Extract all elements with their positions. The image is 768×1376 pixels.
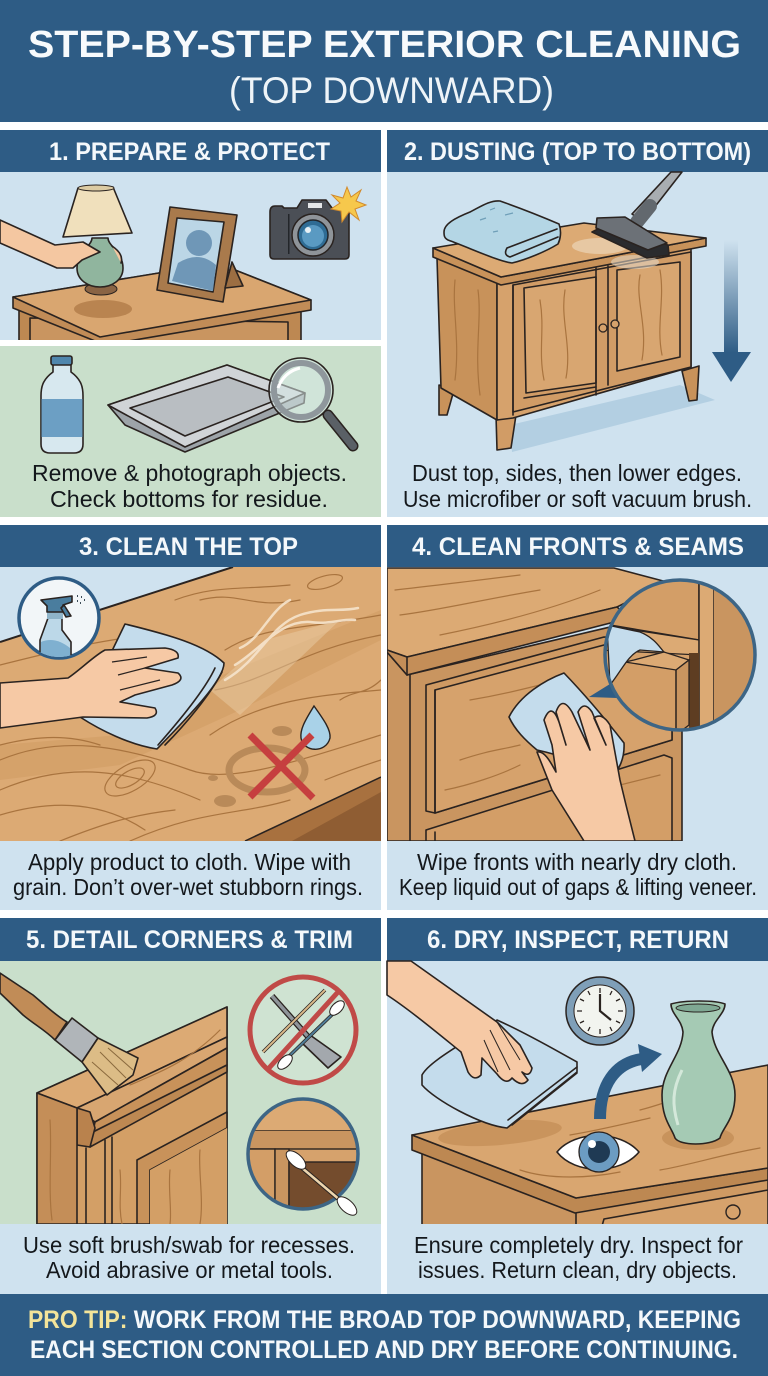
- panel: step 2 dusting: [387, 130, 768, 517]
- caption: step 5: Use soft brush/swab for recesses.: [23, 1232, 355, 1258]
- caption: step 1: Check bottoms for residue.: [50, 486, 328, 512]
- illustration: bottle, tray, magnifier: [0, 346, 381, 517]
- heading: step 1: [0, 130, 381, 172]
- pro tip text: [28, 1306, 741, 1364]
- illustration: dresser drawer: [387, 567, 768, 841]
- caption: step 3: grain. Don’t over-wet stubborn rings.: [13, 874, 363, 900]
- caption: step 3: Apply product to cloth. Wipe with: [28, 849, 351, 875]
- icon: cloth under hand: [80, 624, 224, 749]
- title: STEP-BY-STEP EXTERIOR CLEANING: [28, 24, 741, 66]
- icon: swab in corner detail: [245, 1099, 361, 1222]
- heading: step 3: [0, 525, 381, 567]
- icon: eye: [557, 1132, 639, 1172]
- arrow: return to table: [600, 1044, 662, 1119]
- caption: step 1: [32, 460, 347, 512]
- caption: step 4: [387, 841, 768, 910]
- panel: step 1 prepare and protect: [0, 130, 381, 517]
- heading: step 2: 2. DUSTING (TOP TO BOTTOM): [404, 138, 751, 166]
- caption: step 5: Avoid abrasive or metal tools.: [46, 1257, 333, 1283]
- icon: water ring with red cross: [208, 706, 330, 807]
- heading: step 4: 4. CLEAN FRONTS & SEAMS: [412, 533, 744, 561]
- icon: paint brush: [0, 973, 138, 1095]
- icon: spray bottle in circle: [19, 578, 99, 660]
- caption: step 2: Use microfiber or soft vacuum brush.: [403, 486, 752, 512]
- icon: tray: [108, 365, 305, 452]
- icon: vase: [662, 1001, 735, 1144]
- icon: clock: [566, 977, 634, 1045]
- icon: folded microfiber towel: [444, 201, 561, 263]
- caption: step 1: Remove & photograph objects.: [32, 460, 347, 486]
- illustration: cabinet: [433, 223, 715, 452]
- caption: step 4: Wipe fronts with nearly dry cloth.: [417, 849, 737, 875]
- illustration: trim with brush: [0, 961, 381, 1224]
- caption: step 6: Ensure completely dry. Inspect for: [414, 1232, 743, 1258]
- panel: step 6 dry, inspect, return: [387, 918, 768, 1294]
- illustration: table with lamp, frame and camera: [0, 172, 381, 345]
- panel: step 3 clean the top: [0, 525, 381, 910]
- icon: hand: [0, 648, 181, 728]
- caption: step 6: issues. Return clean, dry objects.: [418, 1257, 737, 1283]
- illustration: table, hand, vase: [387, 961, 768, 1226]
- heading: step 5: [0, 918, 381, 961]
- icon: camera with flash: [270, 187, 366, 259]
- heading: step 1: 1. PREPARE & PROTECT: [49, 138, 330, 166]
- callout: zoomed seam: [589, 578, 757, 732]
- icon: prohibited sharp tools: [250, 977, 356, 1083]
- icon: hand: [537, 704, 635, 841]
- arrow: top to bottom: [712, 240, 751, 382]
- caption: step 2: Dust top, sides, then lower edges.: [412, 460, 742, 486]
- caption: step 6: [387, 1224, 768, 1294]
- caption: step 2: [403, 460, 752, 512]
- panel: step 4 clean fronts and seams: [387, 525, 768, 910]
- heading: step 3: 3. CLEAN THE TOP: [79, 533, 298, 561]
- icon: cloth and hand: [387, 961, 577, 1128]
- icon: cloth under hand: [509, 673, 624, 780]
- caption: step 5: [0, 1224, 381, 1294]
- heading: step 4: [387, 525, 768, 567]
- title: (TOP DOWNWARD): [229, 70, 554, 111]
- title banner: [0, 0, 768, 122]
- icon: vacuum brush: [592, 172, 682, 258]
- title: [28, 24, 741, 111]
- heading: step 6: 6. DRY, INSPECT, RETURN: [427, 926, 729, 954]
- illustration: wiping tabletop: [0, 567, 381, 841]
- footer: pro tip: [0, 1294, 768, 1376]
- heading: step 6: [387, 918, 768, 961]
- icon: magnifying glass: [269, 358, 353, 446]
- heading: step 5: 5. DETAIL CORNERS & TRIM: [26, 926, 353, 954]
- panel: step 5 detail corners and trim: [0, 918, 381, 1294]
- caption: step 3: [0, 841, 381, 910]
- icon: water bottle: [41, 356, 83, 453]
- heading: step 2: [387, 130, 768, 172]
